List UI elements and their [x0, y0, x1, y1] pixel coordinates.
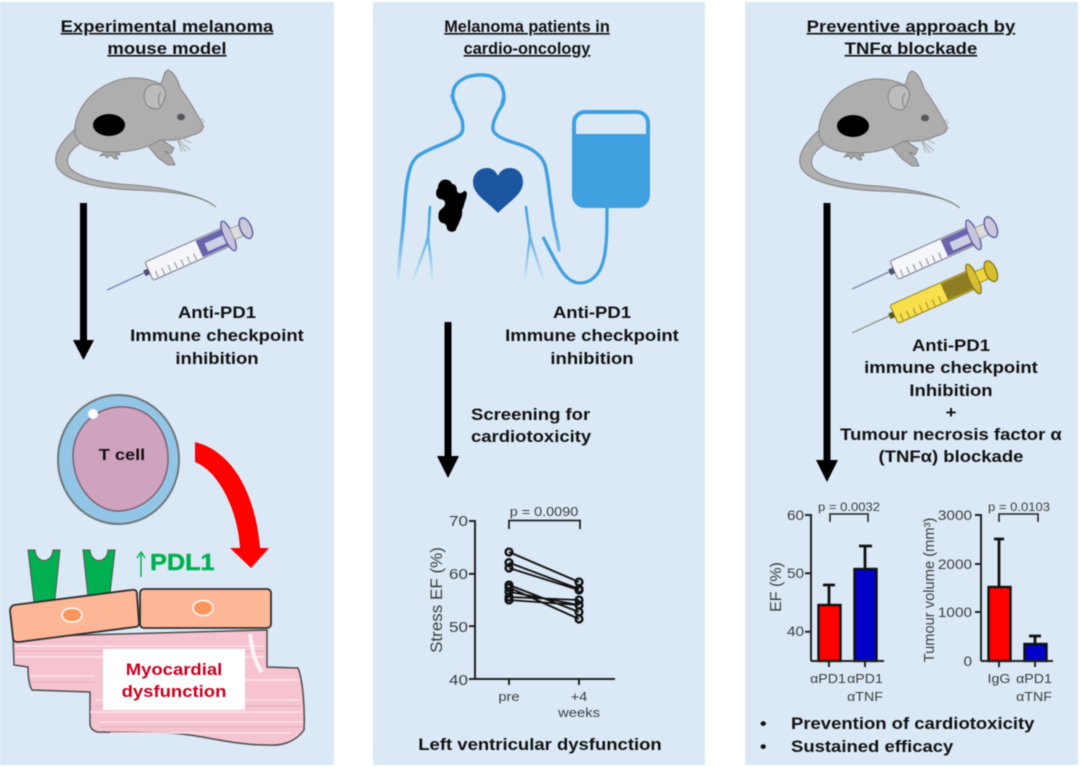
- text: combined treatment: Anti-PD1: [912, 336, 990, 355]
- text: anti-PD1 immune checkpoint inhibition: [130, 303, 304, 368]
- chart: stress EF pre vs +4 weeks: 70: [449, 513, 468, 530]
- icon: mouse with melanoma: [800, 71, 960, 208]
- heading: melanoma patients in cardio-oncology: Melanoma patients in: [444, 18, 610, 36]
- arrow: red curved T cell to myocardium: [195, 442, 269, 568]
- chart: EF bar chart: p = 0.0032: [818, 501, 880, 514]
- icon: patient silhouette: [398, 75, 559, 281]
- text: anti-PD1 immune checkpoint inhibition: [505, 303, 679, 368]
- icon: right endothelial cell: [140, 589, 271, 628]
- text: outcomes bullet list: [760, 714, 1035, 756]
- text: outcomes bullet list: Sustained efficacy: [791, 737, 954, 756]
- icon: melanoma lesion: [436, 180, 467, 232]
- arrow: patient to screening: [437, 322, 459, 478]
- text: left ventricular dysfunction: Left ventricular dysfunction: [418, 735, 662, 754]
- label: upregulated PDL1: PDL1: [150, 550, 215, 576]
- text: combined treatment: Inhibition: [909, 381, 993, 400]
- text: outcomes bullet list: •: [760, 737, 766, 756]
- icon: T cell: T cell: [99, 446, 145, 464]
- text: anti-PD1 immune checkpoint inhibition: inhibition: [550, 349, 634, 368]
- text: anti-PD1 immune checkpoint inhibition: Anti-PD1: [178, 303, 256, 322]
- heading: experimental melanoma mouse model: mouse model: [107, 39, 227, 58]
- chart: stress EF pre vs +4 weeks: p = 0.0090: [510, 505, 579, 519]
- panel: melanoma patients in cardio-oncology: [373, 2, 705, 765]
- text: anti-PD1 immune checkpoint inhibition: inhibition: [175, 349, 259, 368]
- text: combined treatment: (TNFα) blockade: [879, 447, 1024, 466]
- chart: stress EF pre vs +4 weeks: weeks: [557, 705, 600, 720]
- icon: mouse with melanoma: [56, 70, 216, 207]
- text: combined treatment: [840, 336, 1062, 466]
- icon: infusion bag and tube: [543, 112, 648, 283]
- text: screening for cardiotoxicity: [471, 405, 592, 446]
- text: anti-PD1 immune checkpoint inhibition: Immune checkpoint: [505, 326, 679, 345]
- chart: stress EF pre vs +4 weeks: +4: [571, 689, 588, 704]
- chart: stress EF pre vs +4 weeks: pre: [498, 689, 520, 704]
- chart: tumour volume bar chart: [922, 501, 1053, 704]
- heading: melanoma patients in cardio-oncology: [444, 18, 610, 58]
- label: myocardial dysfunction: Myocardial: [126, 660, 222, 679]
- chart: tumour volume bar chart: αPD1: [1016, 672, 1052, 686]
- chart: tumour volume bar chart: 0: [963, 655, 972, 670]
- text: anti-PD1 immune checkpoint inhibition: Immune checkpoint: [130, 326, 304, 345]
- icon: T cell: [58, 395, 179, 524]
- chart: stress EF pre vs +4 weeks: 60: [449, 566, 468, 583]
- chart: EF bar chart: αPD1: [847, 672, 883, 686]
- chart: EF bar chart: 60: [787, 509, 804, 524]
- chart: stress EF pre vs +4 weeks: 40: [449, 672, 468, 689]
- icon: yellow syringe: [845, 254, 1002, 348]
- chart: EF bar chart: αTNF: [847, 690, 883, 704]
- text: combined treatment: +: [946, 403, 956, 422]
- chart: EF bar chart: αPD1: [810, 672, 846, 686]
- icon: PD1 receptors: [28, 550, 115, 602]
- text: combined treatment: Tumour necrosis factor α: [840, 425, 1062, 444]
- text: screening for cardiotoxicity: cardiotoxicity: [471, 427, 592, 446]
- panel: experimental melanoma mouse model: [0, 2, 334, 765]
- heading: preventive approach by TNF-alpha blockade: [807, 17, 1016, 58]
- arrow: mouse to charts: [816, 203, 838, 482]
- chart: tumour volume bar chart: αTNF: [1016, 690, 1052, 704]
- label: myocardial dysfunction: dysfunction: [122, 682, 226, 701]
- icon: myocardial muscle tissue: [13, 630, 304, 745]
- text: combined treatment: immune checkpoint: [864, 358, 1038, 377]
- heading: preventive approach by TNF-alpha blockade: Preventive approach by: [807, 17, 1016, 36]
- chart: EF bar chart: [768, 501, 884, 704]
- text: anti-PD1 immune checkpoint inhibition: Anti-PD1: [553, 303, 631, 322]
- chart: tumour volume bar chart: p = 0.0103: [988, 501, 1050, 514]
- icon: left endothelial cell: [10, 590, 139, 642]
- chart: stress EF pre vs +4 weeks: Stress EF (%): [427, 547, 446, 653]
- chart: EF bar chart: 50: [787, 567, 804, 582]
- chart: EF bar chart: EF (%): [768, 562, 785, 612]
- text: outcomes bullet list: •: [760, 714, 766, 733]
- heading: preventive approach by TNF-alpha blockade: TNFα blockade: [845, 39, 978, 58]
- chart: tumour volume bar chart: 3000: [938, 509, 972, 524]
- heading: melanoma patients in cardio-oncology: cardio-oncology: [464, 40, 590, 58]
- icon: heart: [473, 168, 523, 213]
- chart: stress EF pre vs +4 weeks: [427, 505, 615, 720]
- chart: tumour volume bar chart: 1000: [938, 606, 972, 621]
- icon: white syringe: [845, 210, 1002, 304]
- label: myocardial dysfunction: [103, 649, 245, 710]
- text: outcomes bullet list: Prevention of cardiotoxicity: [791, 714, 1035, 733]
- chart: stress EF pre vs +4 weeks: 50: [449, 619, 468, 636]
- chart: tumour volume bar chart: IgG: [988, 672, 1010, 686]
- chart: tumour volume bar chart: 2000: [938, 558, 972, 573]
- chart: tumour volume bar chart: Tumour volume (mm³): [922, 518, 938, 662]
- icon: syringe: [100, 211, 257, 305]
- text: screening for cardiotoxicity: Screening for: [471, 405, 590, 424]
- chart: EF bar chart: 40: [787, 625, 804, 640]
- heading: experimental melanoma mouse model: Experimental melanoma: [61, 17, 274, 36]
- arrow: mouse to T cell: [73, 203, 94, 360]
- heading: experimental melanoma mouse model: [61, 17, 274, 58]
- panel: preventive approach by TNF-alpha blockade: [745, 2, 1078, 765]
